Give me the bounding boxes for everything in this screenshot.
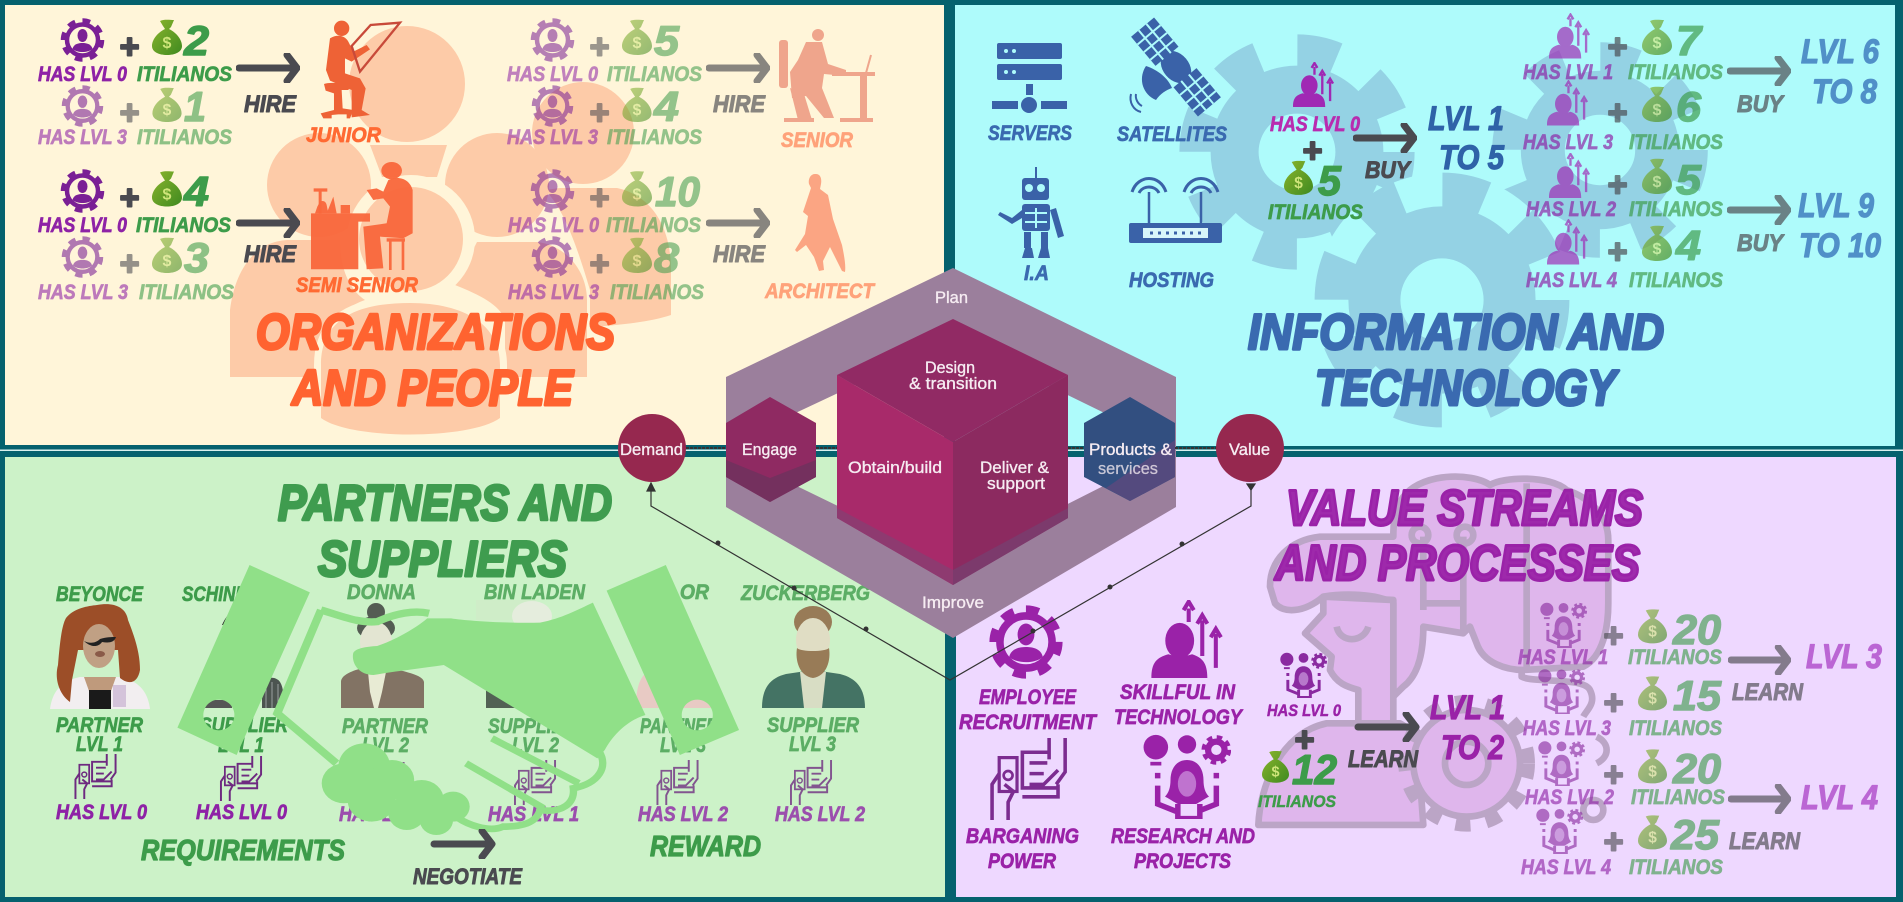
row: has lvl 4 plus 25: ITILIANOS [1629,856,1723,879]
card: taylor partner lvl 3: HAS LVL 2 [638,803,728,826]
row: has lvl 0 plus 4 itilianos: ITILIANOS [136,214,231,237]
arrow: buy lvl 6 to 8 [1730,58,1788,118]
row: has lvl 2 plus 20: 20 [1672,745,1721,792]
block: lvl 0 requirement: + [1302,132,1322,170]
label: servers: SERVERS [988,122,1072,145]
icon: gears background [1196,51,1692,427]
panel: information and technology [955,5,1895,446]
block: lvl 0 requirement: ITILIANOS [1268,201,1363,224]
heading: partners and suppliers: SUPPLIERS [318,531,567,587]
row: has lvl 1 plus 20: + [1603,617,1623,655]
block: lvl 0 requirement: ITILIANOS [1258,792,1337,811]
card: bin laden supplier lvl 2: LVL 2 [512,734,559,757]
card: beyonce partner lvl 1: BEYONCE [56,583,144,606]
row: has lvl 3 plus 4 itilianos: + [589,94,609,132]
row: has lvl 4 plus 4: ITILIANOS [1629,269,1723,292]
label: lvl 9 to 10 [1798,187,1881,265]
cube: central value chain: Design [925,358,975,377]
row: has lvl 3 plus 15: HAS LVL 3 [1523,717,1611,740]
block: lvl 0 requirement [1258,653,1341,811]
circle: demand: Demand [620,440,683,459]
card: zuckerberg supplier lvl 3 [740,582,870,826]
row: has lvl 3 plus 4 itilianos: HAS LVL 3 [507,126,598,149]
card: zuckerberg supplier lvl 3: LVL 3 [789,733,836,756]
icon: head with ideas background [1258,477,1608,825]
block: lvl 0 requirement: + [1294,721,1314,759]
card: zuckerberg supplier lvl 3: ZUCKERBERG [740,582,870,605]
row: has lvl 3 plus 6: 6 [1676,83,1702,130]
row: has lvl 4 plus 25: 25 [1670,811,1720,858]
hexagon: engage: Engage [742,440,797,459]
card: bin laden supplier lvl 2 [476,581,586,826]
row: has lvl 0 plus 10 itilianos: ITILIANOS [606,214,701,237]
arrow: hire senior: HIRE [713,91,766,118]
row: has lvl 1 plus 20: 20 [1672,606,1721,653]
row: has lvl 1 plus 7: ITILIANOS [1628,61,1723,84]
label: lvl 1 to 5: LVL 1 [1428,100,1504,138]
label: lvl 6 to 8: TO 8 [1812,73,1877,111]
row: has lvl 3 plus 15 [1523,669,1722,740]
heading: organizations and people [256,304,615,416]
row: has lvl 4 plus 25: HAS LVL 4 [1521,856,1611,879]
card: schindler supplier lvl 1: SCHINDLER [182,583,283,606]
row: has lvl 0 plus 10 itilianos [508,168,701,237]
label: lvl 1 to 2: LVL 1 [1430,689,1505,727]
card: beyonce partner lvl 1: HAS LVL 0 [56,801,147,824]
block: lvl 0 requirement: 12 [1292,746,1337,793]
card: taylor partner lvl 3: TAYLOR [632,581,710,604]
arrow: value to demand feedback [647,483,1255,680]
arrow: negotiate: NEGOTIATE [413,864,523,889]
label: lvl 1 to 5 [1428,100,1505,177]
card: zuckerberg supplier lvl 3: SUPPLIER [767,714,860,737]
label: lvl 1 to 2: TO 2 [1441,729,1504,767]
labels: plan and improve: Improve [922,593,984,612]
row: has lvl 1 plus 20: ITILIANOS [1628,646,1722,669]
arrow: learn lvl 1 to 2: LEARN [1348,746,1419,773]
row: has lvl 3 plus 3 itilianos [38,234,234,304]
block: lvl 0 requirement [1268,63,1363,224]
icon: router hosting [1129,178,1222,243]
arrow: hire junior [239,55,297,118]
icon: semi senior chemist [311,162,413,270]
label: senior: SENIOR [781,129,854,152]
row: has lvl 3 plus 1 itilianos [38,83,232,149]
row: has lvl 3 plus 6 [1523,82,1723,154]
arrow: learn lvl 3: LEARN [1732,679,1804,706]
hexagon: products and services [1084,397,1175,501]
card: taylor partner lvl 3: PARTNER [640,715,719,738]
heading: information and technology: INFORMATION AND [1248,304,1664,360]
row: has lvl 3 plus 3 itilianos: 3 [184,234,209,281]
card: beyonce partner lvl 1: LVL 1 [76,733,123,756]
arrow: buy lvl 6 to 8: BUY [1737,91,1785,118]
arrow: hire senior [709,55,767,118]
cube: central value chain [837,319,1068,585]
row: has lvl 3 plus 15: 15 [1673,672,1722,719]
label: lvl 9 to 10: TO 10 [1799,227,1881,265]
card: schindler supplier lvl 1: HAS LVL 0 [196,801,287,824]
block: lvl 0 requirement: 5 [1318,157,1342,204]
card: donna partner lvl 2 [339,581,430,826]
diagram: service value chain [618,268,1284,680]
row: has lvl 0 plus 4 itilianos: 4 [183,168,209,215]
heading: value streams and processes: VALUE STREAMS [1286,480,1643,536]
heading: organizations and people: AND PEOPLE [290,360,574,416]
row: has lvl 2 plus 5: HAS LVL 2 [1526,198,1616,221]
row: has lvl 0 plus 5 itilianos: + [589,28,609,66]
cube: central value chain: Deliver & [980,458,1050,477]
card: bin laden supplier lvl 2: BIN LADEN [484,581,586,604]
panel: organizations and people [5,5,944,445]
heading: information and technology: TECHNOLOGY [1315,360,1620,416]
row: has lvl 3 plus 15: + [1603,684,1623,722]
block: employee recruitment [959,611,1098,734]
icon: satellite [1130,18,1221,116]
block: employee recruitment: EMPLOYEE [979,686,1077,709]
row: has lvl 0 plus 4 itilianos: HAS LVL 0 [38,214,127,237]
row: has lvl 2 plus 5 [1526,154,1723,221]
block: research and projects: RESEARCH AND [1111,825,1255,848]
arrow: learn lvl 1 to 2 [1348,714,1419,773]
heading: organizations and people: ORGANIZATIONS [256,304,615,360]
row: has lvl 1 plus 7: HAS LVL 1 [1523,61,1613,84]
cube: central value chain: support [987,474,1045,493]
row: has lvl 0 plus 5 itilianos: HAS LVL 0 [507,63,598,86]
card: donna partner lvl 2: PARTNER [342,715,429,738]
row: has lvl 3 plus 1 itilianos: + [119,94,139,132]
flow connectors [686,447,1217,449]
card: donna partner lvl 2: DONNA [347,581,416,604]
icon: robot [998,167,1064,258]
arrow: hire junior: HIRE [244,91,297,118]
arrow: learn lvl 4: LEARN [1729,828,1801,855]
label: requirements: REQUIREMENTS [141,835,346,867]
row: has lvl 3 plus 4 itilianos [507,83,702,149]
row: has lvl 4 plus 4: + [1607,233,1627,271]
label: lvl 6 to 8 [1801,33,1880,111]
card: schindler supplier lvl 1: SUPPLIER [200,714,289,737]
hexagon: engage [726,397,816,502]
label: lvl 6 to 8: LVL 6 [1801,33,1880,71]
row: has lvl 4 plus 4: 4 [1675,222,1701,269]
divider line [0,450,1903,451]
hexagon: products and services: Products & [1089,440,1173,459]
block: lvl 0 requirement: HAS LVL 0 [1270,113,1360,136]
block: research and projects: PROJECTS [1134,850,1231,873]
row: has lvl 3 plus 1 itilianos: ITILIANOS [137,126,232,149]
arrow: buy lvl 1 to 5 [1356,125,1414,184]
row: has lvl 3 plus 4 itilianos: ITILIANOS [607,126,702,149]
block: employee recruitment: RECRUITMENT [959,711,1098,734]
block: skillful in technology: SKILLFUL IN [1120,681,1236,704]
row: has lvl 4 plus 25: + [1603,823,1623,861]
row: has lvl 2 plus 5: ITILIANOS [1629,198,1723,221]
row: has lvl 3 plus 3 itilianos: + [119,245,139,283]
row: has lvl 2 plus 5: + [1607,166,1627,204]
label: lvl 1 to 2 [1430,689,1505,767]
card: taylor partner lvl 3: LVL 3 [660,734,706,757]
row: has lvl 0 plus 10 itilianos: HAS LVL 0 [508,214,599,237]
cube: central value chain: Obtain/build [848,458,942,477]
card: donna partner lvl 2: LVL 2 [362,734,409,757]
row: has lvl 3 plus 6: ITILIANOS [1629,131,1723,154]
row: has lvl 4 plus 4: HAS LVL 4 [1526,269,1617,292]
block: barganing power [966,738,1079,873]
labels: plan and improve [922,288,984,612]
heading: partners and suppliers [278,475,612,587]
row: has lvl 3 plus 15: ITILIANOS [1629,717,1722,740]
row: has lvl 3 plus 8 itilianos: HAS LVL 3 [508,281,599,304]
row: has lvl 3 plus 6: HAS LVL 3 [1523,131,1613,154]
row: has lvl 0 plus 5 itilianos: 5 [654,17,680,64]
row: has lvl 0 plus 2 itilianos [38,17,232,86]
row: has lvl 4 plus 25 [1521,809,1723,879]
icon: servers [992,43,1067,113]
label: lvl 1 to 5: TO 5 [1439,139,1505,177]
arrow: hire semi senior: HIRE [244,241,297,268]
block: research and projects [1111,735,1255,873]
row: has lvl 1 plus 7: + [1607,28,1627,66]
circle: value [1216,414,1284,482]
heading: value streams and processes [1273,480,1643,591]
row: has lvl 3 plus 8 itilianos: 8 [654,234,680,281]
card: bin laden supplier lvl 2: HAS LVL 1 [488,803,579,826]
hexagon: products and services: services [1098,459,1158,478]
cube: central value chain: & transition [909,374,997,393]
labels: plan and improve: Plan [935,288,968,307]
block: barganing power: POWER [988,850,1057,873]
row: has lvl 3 plus 8 itilianos: ITILIANOS [610,281,704,304]
arrow: negotiate [413,831,523,889]
card: zuckerberg supplier lvl 3: HAS LVL 2 [775,803,865,826]
row: has lvl 1 plus 7: 7 [1676,17,1703,64]
row: has lvl 0 plus 2 itilianos: + [119,28,139,66]
row: has lvl 3 plus 1 itilianos: HAS LVL 3 [38,126,127,149]
row: has lvl 1 plus 20: HAS LVL 1 [1518,646,1608,669]
row: has lvl 0 plus 5 itilianos [507,17,702,86]
card: taylor partner lvl 3 [632,581,728,826]
circle: value: Value [1229,440,1270,459]
arrow: hire semi senior [239,210,297,268]
card: schindler supplier lvl 1 [182,583,289,824]
arrow: learn lvl 4 [1729,786,1801,855]
arrow: hire architect [709,210,767,268]
row: has lvl 3 plus 8 itilianos: + [589,245,609,283]
block: skillful in technology: TECHNOLOGY [1114,706,1244,729]
row: has lvl 2 plus 20: HAS LVL 2 [1525,786,1614,809]
icon: architect figure [795,174,845,272]
row: has lvl 3 plus 8 itilianos [508,234,704,304]
card: beyonce partner lvl 1: PARTNER [56,714,144,737]
block: barganing power: BARGANING [966,825,1079,848]
row: has lvl 2 plus 20: + [1603,756,1623,794]
row: has lvl 2 plus 20 [1525,741,1725,809]
row: has lvl 2 plus 5: 5 [1676,156,1702,203]
icon: people group background [230,26,671,434]
row: has lvl 4 plus 4 [1526,221,1723,292]
heading: partners and suppliers: PARTNERS AND [278,475,612,531]
arrow: hire architect: HIRE [713,241,766,268]
circle: demand [618,414,686,482]
label: hosting: HOSTING [1129,269,1214,292]
label: architect: ARCHITECT [764,280,876,303]
arrow: learn lvl 3 [1731,647,1804,706]
card: bin laden supplier lvl 2: SUPPLIER [488,715,577,738]
row: has lvl 0 plus 5 itilianos: ITILIANOS [607,63,702,86]
ring: plan and improve hexagon [726,268,1176,638]
row: has lvl 3 plus 3 itilianos: ITILIANOS [139,281,234,304]
icon: handshake overlay [177,565,739,835]
icon: senior at desk [779,29,875,122]
row: has lvl 3 plus 1 itilianos: 1 [184,83,206,130]
card: donna partner lvl 2: HAS LVL 1 [339,803,430,826]
card: schindler supplier lvl 1: LVL 1 [218,734,264,757]
row: has lvl 3 plus 3 itilianos: HAS LVL 3 [38,281,128,304]
label: reward: REWARD [650,831,761,863]
row: has lvl 1 plus 7 [1523,15,1723,84]
label: lvl 9 to 10: LVL 9 [1798,187,1874,225]
row: has lvl 1 plus 20 [1518,603,1722,669]
row: has lvl 0 plus 4 itilianos [38,168,231,237]
row: has lvl 0 plus 10 itilianos: 10 [655,168,700,215]
row: has lvl 0 plus 4 itilianos: + [119,179,139,217]
heading: value streams and processes: AND PROCESSES [1273,535,1640,591]
row: has lvl 0 plus 2 itilianos: HAS LVL 0 [38,63,127,86]
panel: partners and suppliers [5,457,945,897]
row: has lvl 2 plus 20: ITILIANOS [1631,786,1725,809]
icon: junior draftsman [321,21,400,118]
row: has lvl 3 plus 4 itilianos: 4 [653,83,679,130]
arrow: buy lvl 1 to 5: BUY [1365,157,1412,184]
row: has lvl 3 plus 6: + [1607,94,1627,132]
label: satellites: SATELLITES [1117,123,1227,146]
row: has lvl 0 plus 10 itilianos: + [589,179,609,217]
label: semi senior: SEMI SENIOR [296,274,419,297]
block: lvl 0 requirement: HAS LVL 0 [1267,701,1341,720]
label: junior: JUNIOR [306,124,382,147]
arrow: buy lvl 9 to 10: BUY [1737,230,1785,257]
row: has lvl 0 plus 2 itilianos: 2 [183,17,209,64]
arrow: buy lvl 9 to 10 [1730,197,1788,257]
row: has lvl 0 plus 2 itilianos: ITILIANOS [137,63,232,86]
block: skillful in technology [1114,602,1244,729]
card: beyonce partner lvl 1 [50,583,150,824]
heading: information and technology [1248,304,1664,416]
panel: value streams and processes [956,457,1896,897]
label: I.A: I.A [1024,262,1049,285]
label: lvl 3: LVL 3 [1806,638,1882,676]
label: lvl 4: LVL 4 [1801,779,1878,817]
